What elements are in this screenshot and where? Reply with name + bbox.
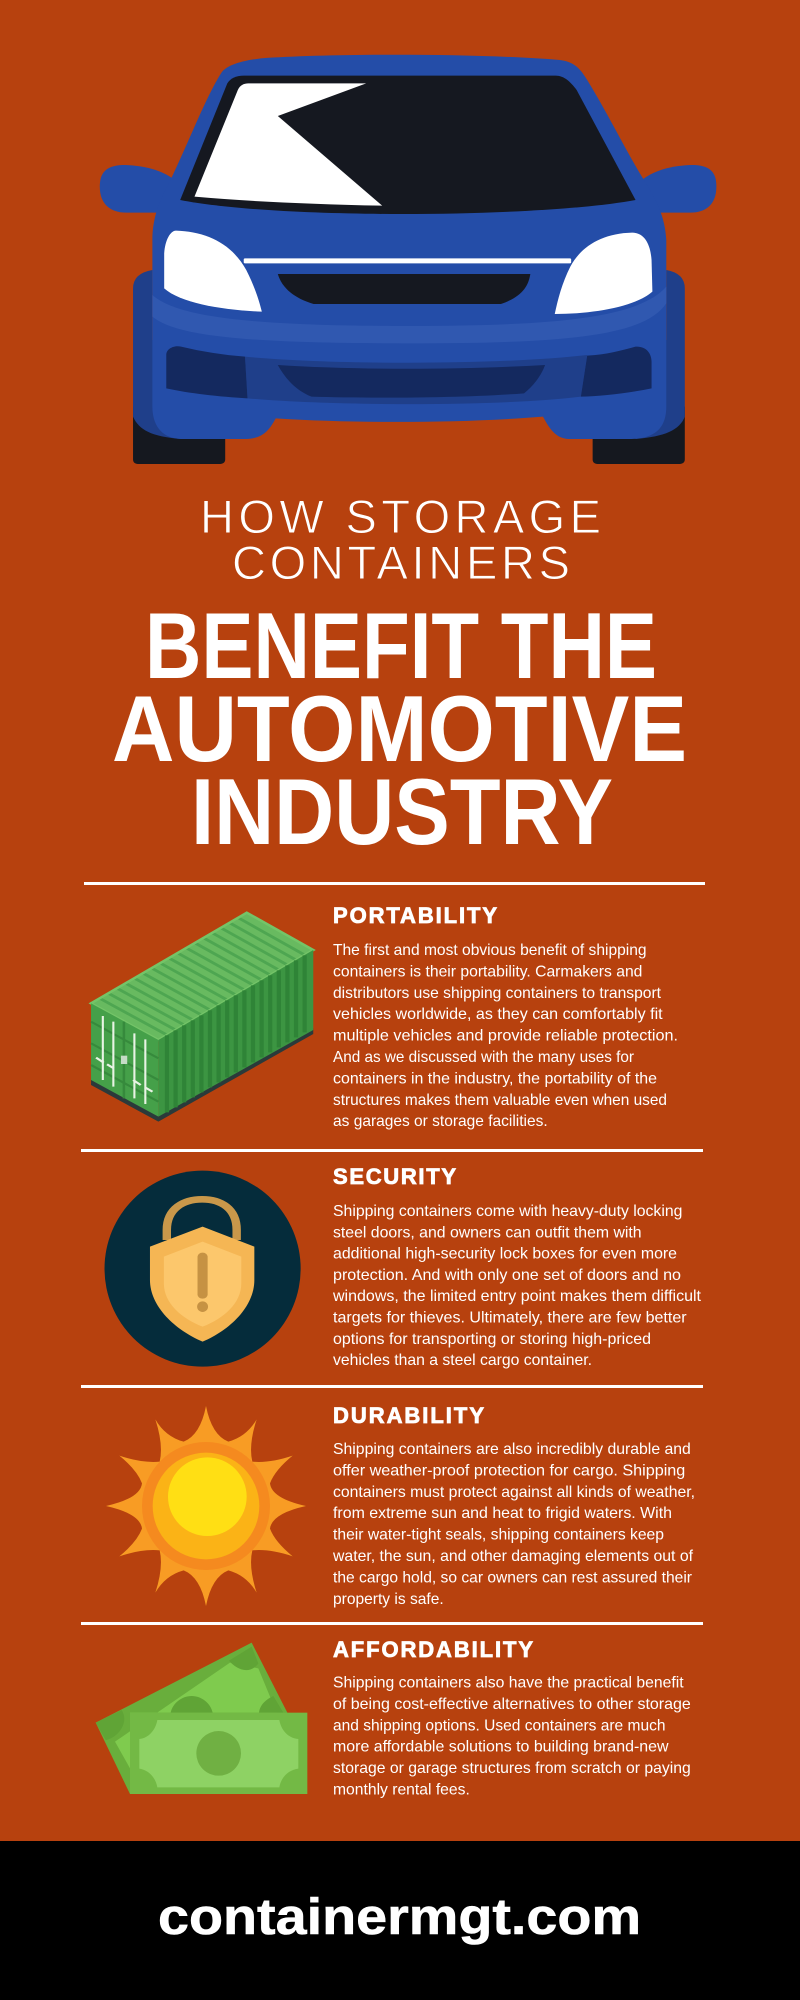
text: durability: their water-tight seals, shipping containers keep: [333, 1527, 664, 1544]
title line 3: BENEFIT THE: [145, 593, 657, 698]
text: portability: And as we discussed with the many uses for: [333, 1049, 635, 1066]
text: portability: multiple vehicles and provide reliable protection.: [333, 1028, 678, 1045]
exclamation bar: [198, 1253, 208, 1299]
left fog panel: [166, 346, 248, 398]
sun rays: [106, 1406, 306, 1606]
text: portability: distributors use shipping containers to transport: [333, 985, 662, 1002]
container door: [91, 1003, 158, 1117]
right tire: [593, 407, 685, 464]
panel: portability: [91, 903, 678, 1130]
text: durability: the cargo hold, so car owners can rest assured their: [333, 1569, 693, 1586]
heading: portability: PORTABILITY: [333, 903, 497, 928]
icon: padlock shield: [105, 1171, 301, 1367]
top rim: [91, 913, 313, 1040]
footer url: containermgt.com: [158, 1888, 641, 1945]
title line 1: HOW STORAGE: [200, 490, 601, 543]
text: affordability: of being cost-effective alternatives to other storage: [333, 1696, 691, 1713]
text: durability: property is safe.: [333, 1591, 444, 1608]
panel: affordability: [96, 1637, 691, 1798]
top ridges: [100, 918, 305, 1035]
front bill: [130, 1713, 307, 1794]
hood line: [244, 258, 571, 263]
front bill face: [139, 1720, 298, 1787]
door rods: [103, 1016, 145, 1104]
text: security: options for transporting or storing high-priced: [333, 1331, 651, 1348]
container base: [91, 1028, 313, 1122]
back bill face: [115, 1663, 277, 1768]
sun halo: [142, 1442, 270, 1570]
right headlight: [555, 233, 652, 314]
door latch: [121, 1056, 127, 1064]
text: affordability: more affordable solutions to building brand-new: [333, 1739, 669, 1756]
text: security: [332, 1203, 702, 1369]
title line 4: AUTOMOTIVE: [112, 676, 687, 781]
text: security: protection. And with only one set of doors and no: [333, 1267, 681, 1284]
text: durability: offer weather-proof protection for cargo. Shipping: [333, 1462, 685, 1479]
text: affordability: monthly rental fees.: [333, 1781, 470, 1798]
text: portability: containers in the industry, the portability of the: [333, 1070, 657, 1087]
text: security: windows, the limited entry point makes them difficult: [332, 1288, 702, 1305]
windshield reflection: [194, 83, 382, 206]
shield outer: [150, 1227, 254, 1342]
icon: sun: [106, 1406, 306, 1606]
side ridges: [167, 955, 305, 1112]
panel: durability: [106, 1403, 695, 1608]
shackle: [167, 1199, 237, 1240]
center intake: [278, 365, 545, 398]
left mirror: [100, 165, 175, 213]
right fog panel: [581, 347, 652, 397]
text: portability: vehicles worldwide, as they can comfortably fit: [333, 1006, 663, 1023]
text: durability: Shipping containers are also incredibly durable and: [333, 1441, 691, 1458]
text: durability: containers must protect against all kinds of weather,: [333, 1484, 695, 1501]
lower intake: [245, 355, 587, 404]
text: security: vehicles than a steel cargo container.: [333, 1352, 592, 1369]
text: portability: The first and most obvious benefit of shipping: [333, 942, 647, 959]
bumper highlight: [152, 287, 666, 343]
door bars: [91, 1022, 158, 1102]
heading: affordability: AFFORDABILITY: [333, 1637, 533, 1662]
left tire: [133, 407, 225, 464]
text: affordability: and shipping options. Used containers are much: [333, 1717, 666, 1734]
text: affordability: Shipping containers also have the practical benefit: [333, 1675, 684, 1692]
exclamation dot: [197, 1301, 208, 1312]
heading: security: SECURITY: [333, 1164, 456, 1189]
text: portability: containers is their portability. Carmakers and: [333, 963, 642, 980]
icon: green shipping container: [91, 913, 313, 1122]
right mirror: [642, 165, 716, 213]
heading: durability: DURABILITY: [333, 1403, 484, 1428]
text: portability: [333, 942, 678, 1130]
panel: security: [105, 1164, 702, 1369]
text: security: targets for thieves. Ultimately, there are few better: [333, 1310, 687, 1326]
text: portability: structures makes them valuable even when used: [333, 1092, 667, 1109]
footer band: [0, 1841, 800, 2000]
text: security: Shipping containers come with heavy-duty locking: [333, 1203, 682, 1220]
front bill seal: [196, 1731, 241, 1776]
icon: blue car front view: [100, 55, 716, 464]
container side: [158, 950, 313, 1117]
back bill: [96, 1643, 287, 1794]
grille: [278, 274, 530, 304]
title: [112, 490, 687, 864]
text: affordability: storage or garage structures from scratch or paying: [333, 1760, 691, 1777]
text: portability: as garages or storage facilities.: [333, 1113, 548, 1130]
car body: [152, 55, 666, 439]
back bill marks: [96, 1647, 283, 1740]
left headlight: [164, 231, 262, 312]
icon: green banknotes: [96, 1643, 307, 1794]
text: affordability: [333, 1675, 691, 1798]
windshield: [180, 76, 636, 214]
text: durability: from extreme sun and heat to frigid waters. With: [333, 1505, 672, 1522]
title line 2: CONTAINERS: [232, 536, 570, 589]
sun core: [168, 1457, 247, 1536]
sun middle: [153, 1453, 259, 1559]
title line 5: INDUSTRY: [191, 759, 613, 864]
icon circle: [105, 1171, 301, 1367]
right fender: [636, 270, 685, 439]
text: durability: water, the sun, and other damaging elements out of: [332, 1548, 694, 1565]
door handles: [96, 1058, 152, 1092]
text: security: additional high-security lock boxes for even more: [333, 1246, 677, 1263]
container top: [91, 913, 313, 1040]
shield inner: [164, 1242, 241, 1327]
text: durability: [332, 1441, 695, 1608]
left fender: [133, 270, 181, 439]
text: security: steel doors, and owners can outfit them with: [333, 1224, 642, 1241]
